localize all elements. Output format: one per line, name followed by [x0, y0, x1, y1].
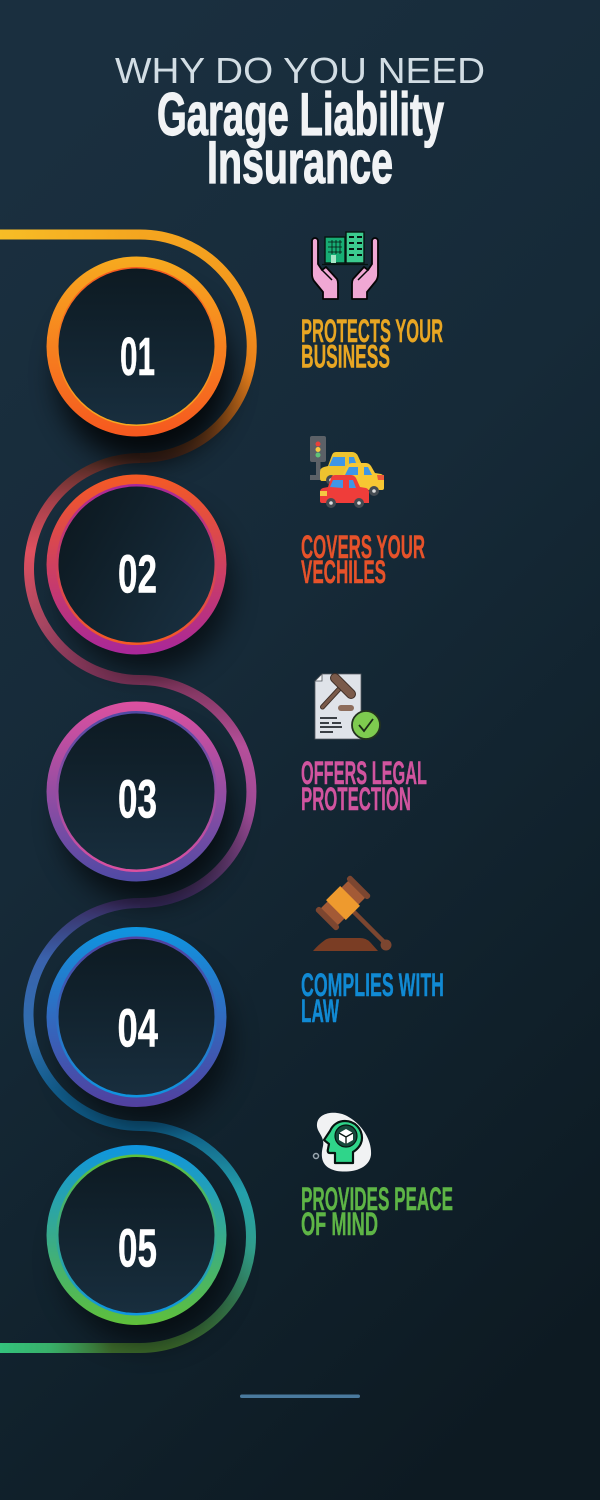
- circle 05: [46, 1145, 230, 1344]
- label: provides peace of mind: PROVIDES PEACE: [301, 1181, 453, 1217]
- circle 02: 02: [118, 544, 157, 604]
- label: offers legal protection: [301, 755, 427, 817]
- label: covers your vechiles: VECHILES: [301, 554, 386, 590]
- label: complies with law: [301, 967, 444, 1029]
- circle 04: 04: [118, 998, 158, 1058]
- title: second main line: Insurance: [207, 129, 393, 196]
- label: provides peace of mind: OF MIND: [301, 1206, 378, 1242]
- title: first main line: Garage Liability: [157, 81, 444, 148]
- circle 01: [46, 256, 230, 462]
- circle 03: [46, 702, 231, 902]
- icon: head with cube: [314, 1113, 371, 1172]
- label: covers your vechiles: [301, 529, 425, 590]
- icon: traffic light and cars: [310, 436, 384, 508]
- icon: hands holding buildings: [312, 232, 378, 299]
- title: eyebrow line: WHY DO YOU NEED: [115, 50, 485, 91]
- circle 03: 03: [118, 770, 157, 830]
- circle 04: [46, 927, 230, 1126]
- footer accent bar: [240, 1394, 360, 1398]
- label: complies with law: LAW: [301, 993, 339, 1029]
- label: offers legal protection: OFFERS LEGAL: [301, 755, 427, 791]
- label: protects your business: BUSINESS: [301, 338, 390, 374]
- label: protects your business: [301, 313, 443, 374]
- icon: legal document with check: [315, 674, 380, 739]
- label: offers legal protection: PROTECTION: [301, 781, 411, 817]
- icon: gavel: [313, 875, 392, 951]
- circle 05: 05: [118, 1218, 157, 1278]
- label: protects your business: PROTECTS YOUR: [301, 313, 443, 349]
- circle 02: [30, 458, 243, 672]
- label: provides peace of mind: [301, 1181, 453, 1242]
- label: covers your vechiles: COVERS YOUR: [301, 529, 425, 565]
- winding connector path: [0, 234, 252, 1348]
- circle 01: 01: [120, 327, 155, 387]
- label: complies with law: COMPLIES WITH: [301, 967, 444, 1003]
- title: [115, 50, 485, 196]
